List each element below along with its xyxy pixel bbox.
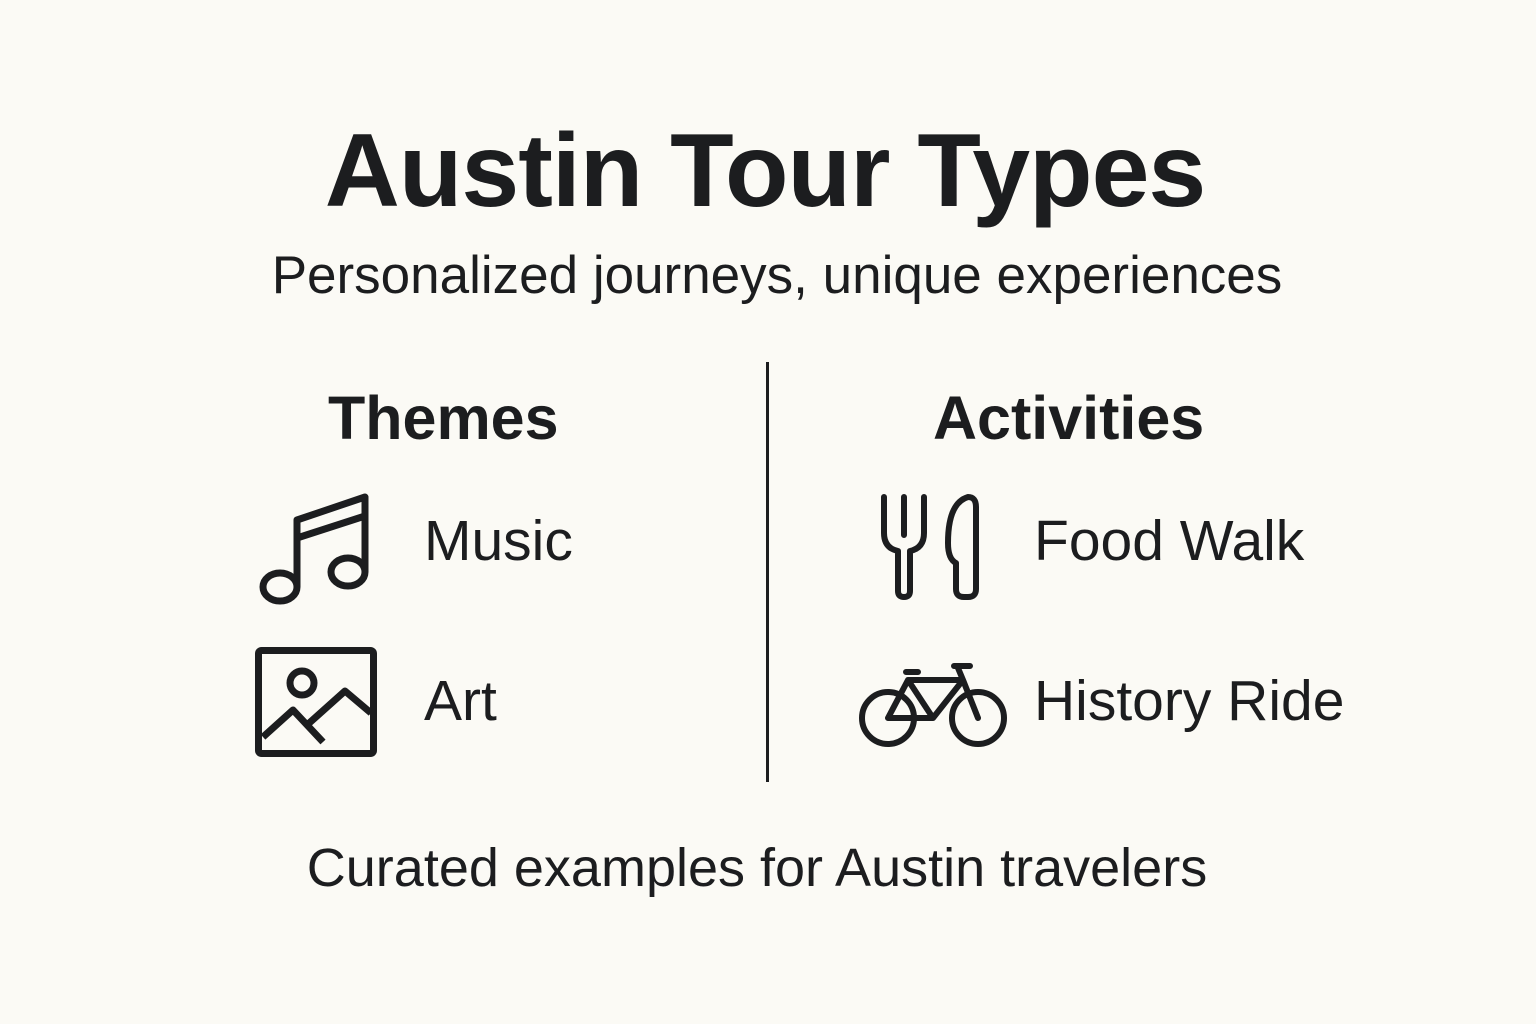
heading: Themes: Themes <box>328 384 559 452</box>
heading: Activities: Activities <box>933 384 1204 452</box>
panel: activities <box>859 384 1344 747</box>
label: Music: Music <box>424 509 573 573</box>
label: Food Walk: Food Walk <box>1034 509 1304 573</box>
subtitle: Personalized journeys, unique experiences <box>272 246 1282 305</box>
footer caption: Curated examples for Austin travelers <box>307 838 1207 898</box>
icon: art frame <box>255 647 377 757</box>
icon: music note <box>260 494 368 604</box>
label: History Ride: History Ride <box>1034 669 1344 733</box>
icon: fork and knife <box>881 494 979 600</box>
title: Austin Tour Types <box>325 113 1205 229</box>
panel: themes <box>255 384 573 757</box>
label: Art: Art <box>424 669 497 733</box>
divider <box>766 362 769 782</box>
icon: bicycle <box>859 663 1007 747</box>
